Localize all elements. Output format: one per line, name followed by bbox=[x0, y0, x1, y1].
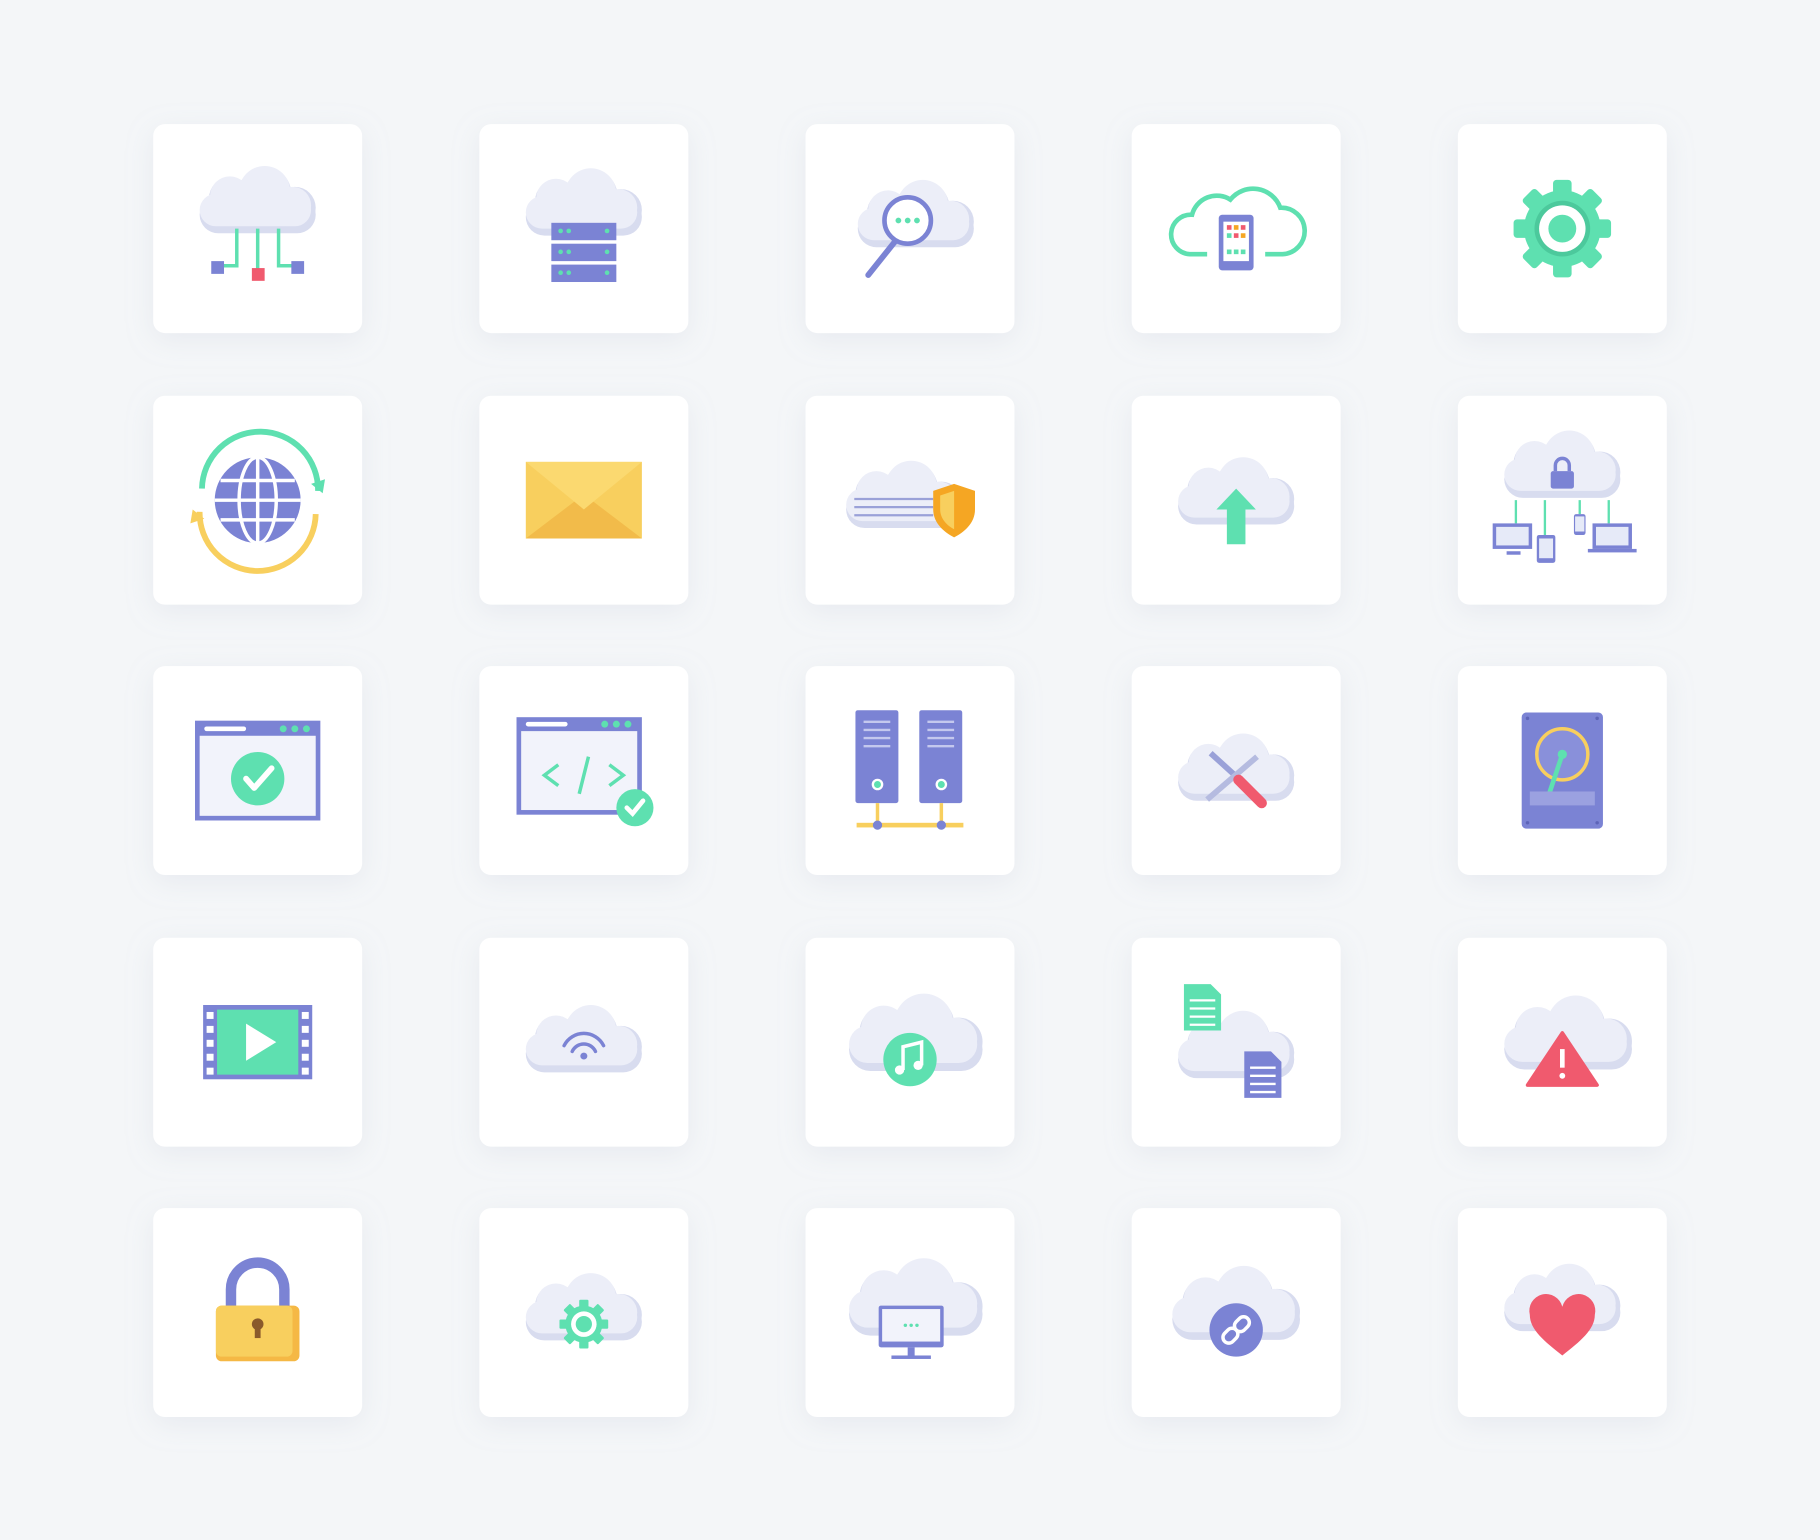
card: cloud heart bbox=[1458, 1208, 1667, 1417]
card: cloud upload bbox=[1132, 396, 1341, 605]
card: cloud server bbox=[479, 124, 688, 333]
card: cloud settings bbox=[479, 1208, 688, 1417]
card: cloud monitor bbox=[806, 1208, 1014, 1417]
card: cloud search bbox=[806, 124, 1014, 333]
card: cloud sync phone bbox=[1132, 124, 1341, 333]
card: cloud link bbox=[1132, 1208, 1341, 1417]
card: browser check bbox=[153, 666, 362, 875]
card: cloud network bbox=[153, 124, 362, 333]
card: server towers bbox=[806, 666, 1014, 875]
card: padlock bbox=[153, 1208, 362, 1417]
card: cloud wifi bbox=[479, 938, 688, 1147]
card: envelope bbox=[479, 396, 688, 605]
card: cloud lock network bbox=[1458, 396, 1667, 605]
card: cloud shield bbox=[806, 396, 1014, 605]
card: cloud documents bbox=[1132, 938, 1341, 1147]
card: cloud warning bbox=[1458, 938, 1667, 1147]
card: cloud tools bbox=[1132, 666, 1341, 875]
card: gear bbox=[1458, 124, 1667, 333]
card: cloud music bbox=[806, 938, 1014, 1147]
card: video bbox=[153, 938, 362, 1147]
card: browser code bbox=[479, 666, 688, 875]
card: globe sync bbox=[153, 396, 362, 605]
card: hard drive bbox=[1458, 666, 1667, 875]
